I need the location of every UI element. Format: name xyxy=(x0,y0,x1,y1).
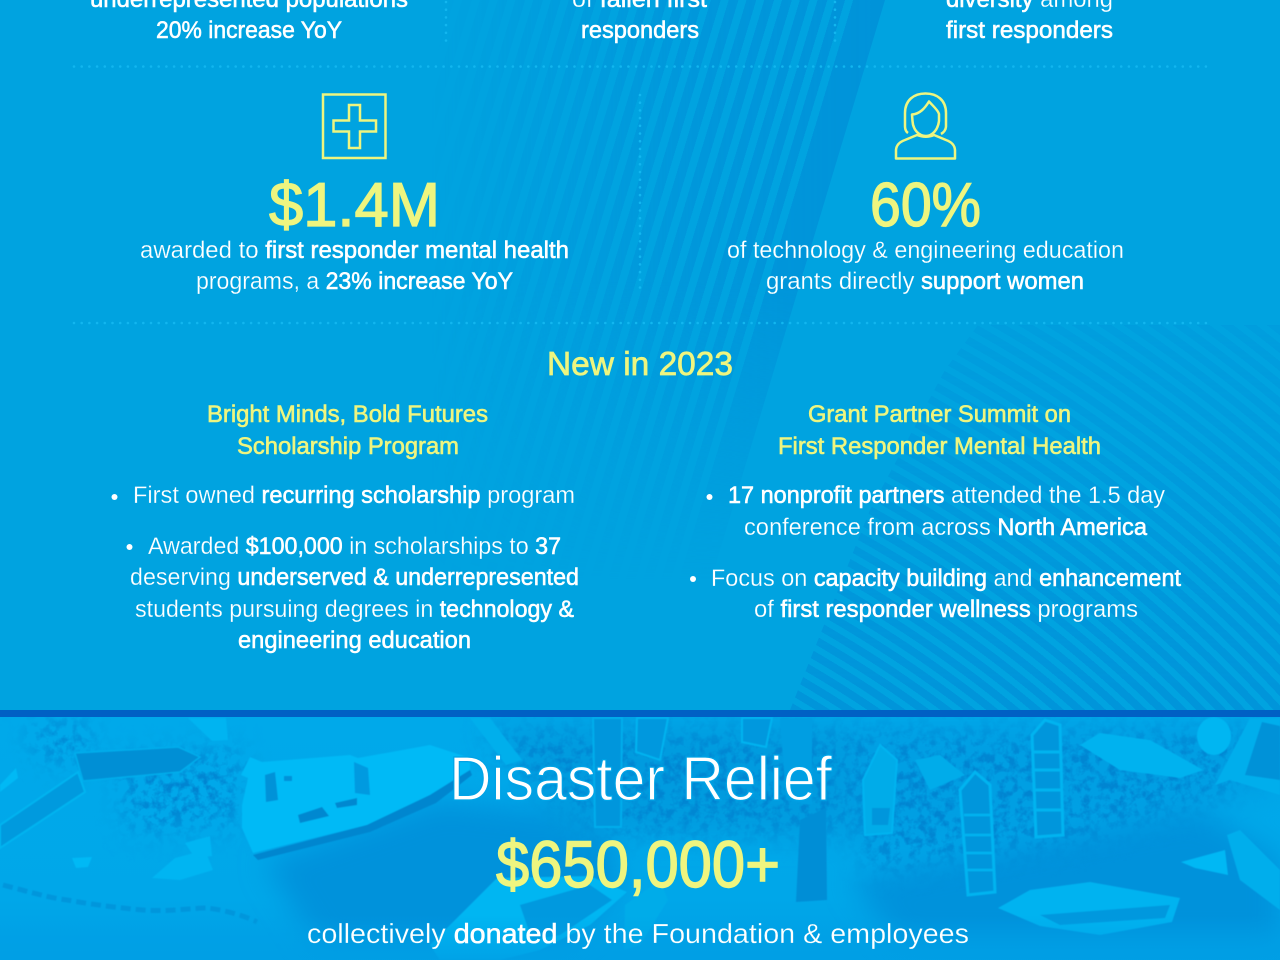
background stripes: straight diagonal band xyxy=(604,0,885,410)
text: women in technology description: grants directly support women xyxy=(766,268,1084,295)
top stat: underrepresented populations xyxy=(90,0,408,44)
stat panel: mental health xyxy=(140,94,569,295)
horizontal rule: lower xyxy=(74,322,1208,324)
top stat: underrepresented populations: 20% increase YoY xyxy=(156,17,342,44)
text: women in technology description xyxy=(727,237,1124,295)
bullet: scholarships awarded: students pursuing degrees in technology & xyxy=(135,596,574,623)
bullet: nonprofit partners: conference from across North America xyxy=(744,514,1148,541)
wreckage: dark boat and left-hand debris xyxy=(0,718,228,880)
photo fade at lower edge xyxy=(431,934,566,960)
stat panel: women in technology xyxy=(727,94,1124,295)
text: mental health description: programs, a 23% increase YoY xyxy=(196,268,513,295)
bullet: capacity building: of first responder wellness programs xyxy=(754,596,1138,623)
stat: $1.4M: $1.4M xyxy=(269,171,440,240)
panel: Grant Partner Summit xyxy=(690,401,1181,623)
wreckage: right-hand boats xyxy=(863,717,1280,935)
dark water xyxy=(265,725,1280,950)
top stat: diversity among first responders xyxy=(946,0,1113,44)
text: mental health description xyxy=(140,237,569,295)
bullet: scholarships awarded: Awarded $100,000 in scholarships to 37 xyxy=(148,533,561,560)
text: donation description: collectively donated by the Foundation & employees xyxy=(307,918,969,949)
top stat: fallen first responders xyxy=(572,0,707,44)
column divider: middle xyxy=(639,95,641,295)
bullet: scholarships awarded: engineering education xyxy=(238,627,471,654)
bullet: scholarships awarded xyxy=(126,533,579,654)
page background xyxy=(0,0,1280,720)
icon: woman xyxy=(896,94,955,158)
wreckage: centre boats xyxy=(430,718,827,960)
bullet: capacity building: Focus on capacity building and enhancement xyxy=(711,565,1181,592)
heading: scholarship program: Scholarship Program xyxy=(237,433,459,460)
rubble texture xyxy=(28,717,1242,872)
section divider bar xyxy=(0,710,1280,717)
bullet: capacity building xyxy=(690,565,1181,623)
top stat: diversity among first responders: first responders xyxy=(946,17,1113,44)
top stat: fallen first responders: responders xyxy=(581,17,699,44)
heading: grant partner summit: Grant Partner Summit on xyxy=(808,401,1071,428)
heading: Disaster Relief: Disaster Relief xyxy=(449,745,833,814)
icon: medical cross xyxy=(323,94,386,158)
bullet: recurring scholarship: First owned recurring scholarship program xyxy=(133,482,575,509)
heading: scholarship program: Bright Minds, Bold Futures xyxy=(207,401,488,428)
wreckage: large white boat xyxy=(241,745,472,860)
panel: Bright Minds scholarship xyxy=(112,401,579,654)
heading: scholarship program xyxy=(207,401,488,460)
heading: grant partner summit xyxy=(778,401,1101,460)
heading: New in 2023: New in 2023 xyxy=(547,345,733,382)
stat: $650,000+: $650,000+ xyxy=(496,827,780,901)
horizontal rule: upper xyxy=(74,65,1208,68)
text: mental health description: awarded to first responder mental health xyxy=(140,237,569,264)
disaster relief photo: damaged boats in blue duotone xyxy=(0,717,1280,960)
stat: 60%: 60% xyxy=(870,171,981,240)
heading: grant partner summit: First Responder Mental Health xyxy=(778,433,1101,460)
text: women in technology description: of technology & engineering education xyxy=(727,237,1124,264)
bullet: nonprofit partners: 17 nonprofit partners attended the 1.5 day xyxy=(728,482,1165,509)
column divider: top left xyxy=(445,2,447,43)
column divider: top right xyxy=(834,2,836,43)
bullet: nonprofit partners xyxy=(706,482,1165,541)
bullet: scholarships awarded: deserving underserved & underrepresented xyxy=(130,564,579,591)
background stripes: curved band xyxy=(790,455,1280,710)
wreckage: shoreline debris xyxy=(3,885,257,922)
